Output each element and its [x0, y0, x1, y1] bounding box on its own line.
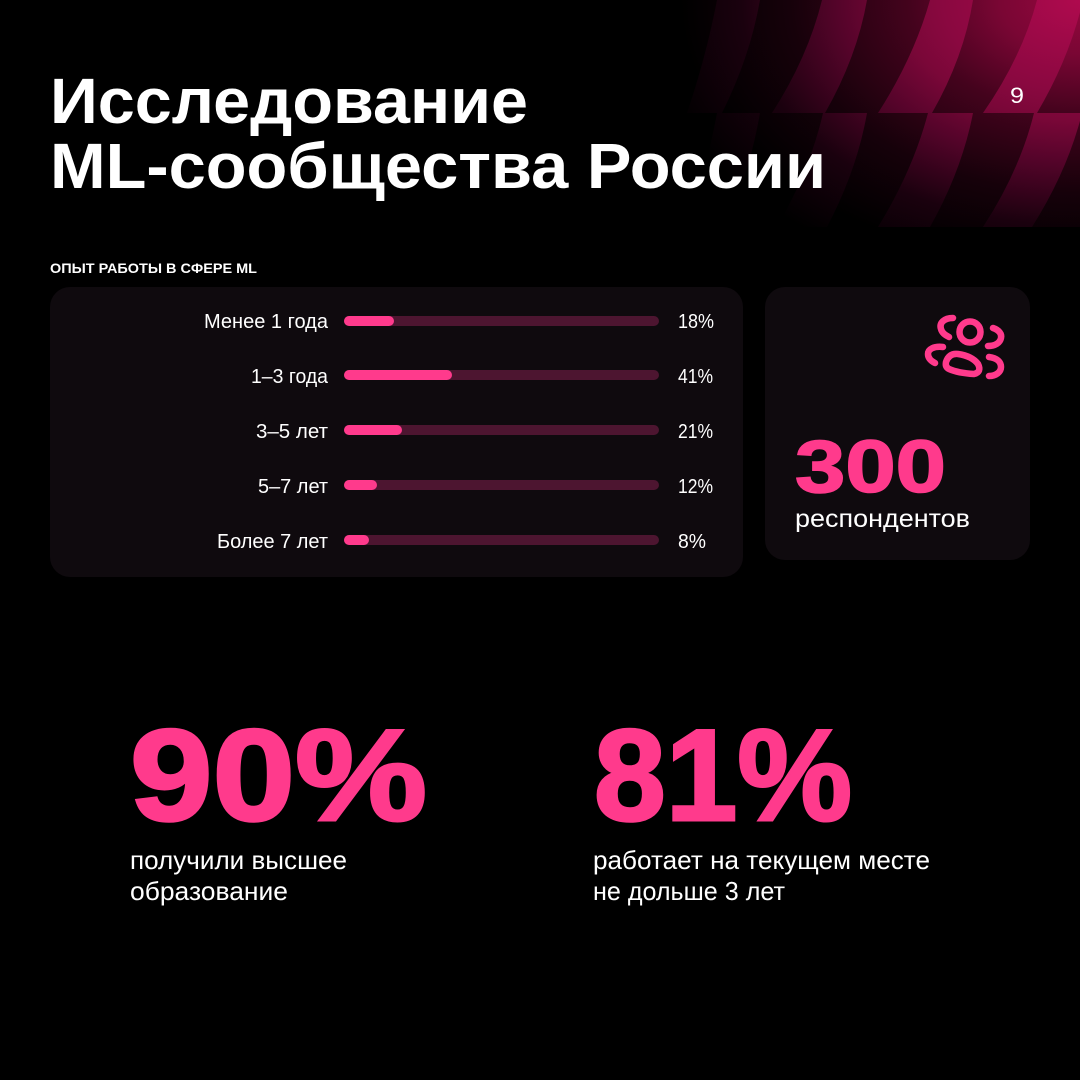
row: more than 7 years: 8% — [678, 531, 706, 553]
row: less than 1 year: Менее 1 года — [204, 311, 329, 333]
stat block: 81 percent: работает на текущем месте — [593, 845, 930, 875]
stat block: 90 percent: образование — [130, 876, 288, 906]
title: Исследование — [50, 65, 528, 137]
stat block: 90 percent: 90% — [130, 702, 427, 848]
row: 1-3 years — [251, 366, 713, 388]
page number: 9 — [1010, 83, 1024, 108]
title: ML-сообщества России — [50, 130, 826, 202]
row: 5-7 years: 12% — [678, 476, 713, 498]
row: 1-3 years: 1–3 года — [251, 366, 329, 388]
row: 3-5 years — [256, 421, 713, 443]
panel: experience bar chart — [50, 287, 743, 577]
stat block: 81 percent: не дольше 3 лет — [593, 876, 785, 906]
stat block: 81 percent: 81% — [594, 702, 852, 848]
stat: 300: 300 — [795, 425, 946, 508]
icon: group of people — [928, 318, 1001, 376]
title — [50, 65, 826, 202]
row: less than 1 year: 18% — [678, 311, 714, 333]
panel: respondents — [765, 287, 1030, 560]
row: 5-7 years — [258, 476, 713, 498]
section heading: work experience: ОПЫТ РАБОТЫ В СФЕРЕ ML — [50, 261, 257, 276]
stat block: 90 percent — [130, 702, 427, 906]
row: less than 1 year — [204, 311, 714, 333]
decorative gradient stripes, top right — [640, 0, 1080, 227]
stat caption: респондентов — [795, 505, 970, 533]
row: 3-5 years: 3–5 лет — [256, 421, 328, 443]
row: 1-3 years: 41% — [678, 366, 713, 388]
row: 3-5 years: 21% — [678, 421, 713, 443]
row: more than 7 years: Более 7 лет — [217, 531, 328, 553]
stat block: 81 percent — [593, 702, 930, 906]
row: more than 7 years — [217, 531, 706, 553]
stat block: 90 percent: получили высшее — [130, 845, 347, 875]
row: 5-7 years: 5–7 лет — [258, 476, 328, 498]
